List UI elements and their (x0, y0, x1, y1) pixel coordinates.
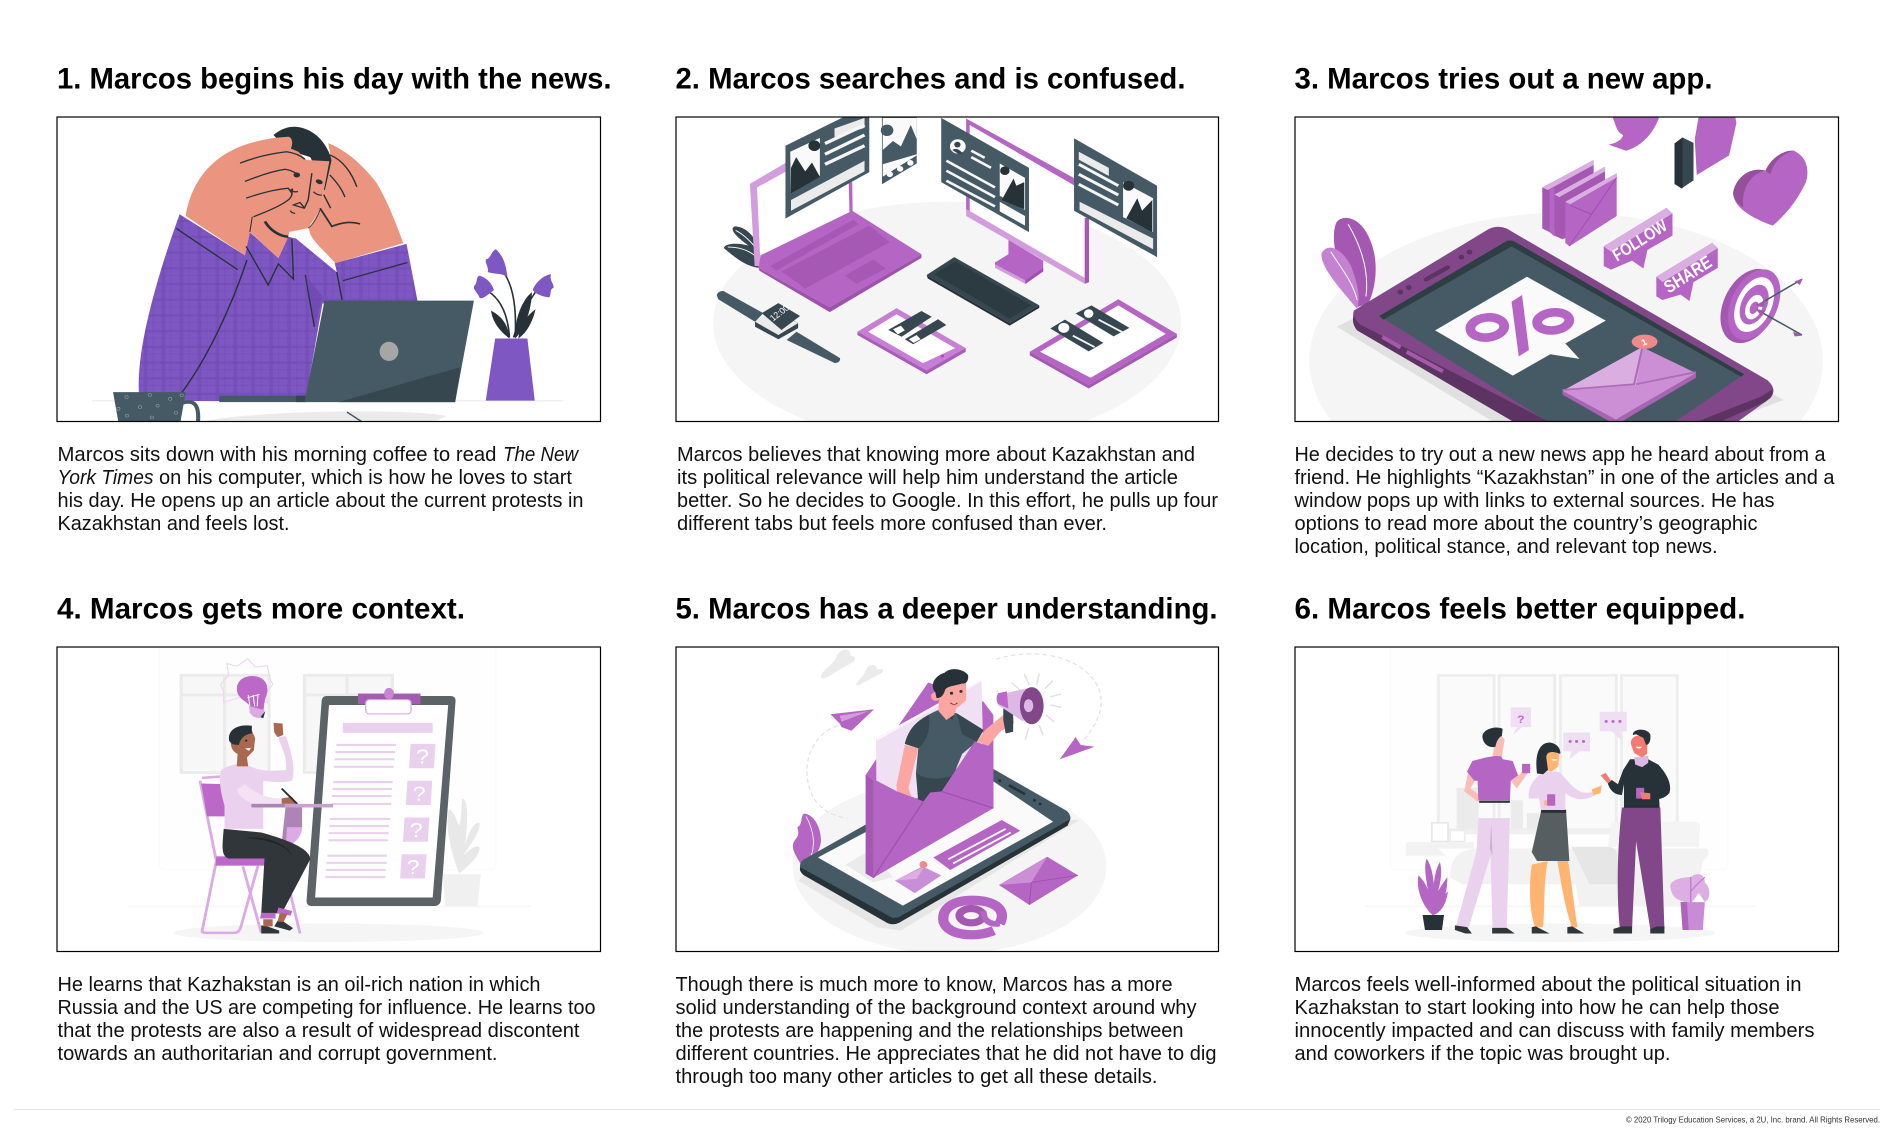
body text 6: Marcos feels well-informed about the political situation in (1294, 974, 1802, 996)
envelope front (866, 741, 993, 878)
keyboard (927, 257, 1039, 326)
at sign (943, 900, 1002, 935)
panel 6: Marcos feels better equipped (1294, 592, 1838, 1065)
chair (200, 776, 300, 934)
mail notification bar (933, 820, 1020, 870)
body text 6: innocently impacted and can discuss with family members (1294, 1020, 1814, 1042)
clipboard: ? (416, 746, 429, 768)
body text 3: options to read more about the country’s geographic (1294, 513, 1758, 535)
laptop (219, 301, 474, 402)
body text 3: friend. He highlights “Kazakhstan” in one of the articles and a (1294, 467, 1835, 489)
body text 4 (58, 974, 596, 1065)
browser window right center (941, 118, 1029, 232)
body text 2 (677, 444, 1218, 535)
illustration 6: three coworkers talking (1365, 645, 1755, 942)
panel 2: Marcos searches and is confused (676, 62, 1218, 535)
large tablet (1030, 299, 1177, 389)
body text 1: on his computer, which is how he loves to start (159, 467, 572, 489)
body text 3: location, political stance, and relevant top news. (1294, 536, 1718, 558)
smart watch: 12:00 (768, 303, 791, 323)
body text 6: Kazhakstan to start looking into how he can help those (1294, 997, 1780, 1019)
illustration 5: man emerging from envelope on phone (793, 650, 1106, 954)
clouds (821, 650, 883, 685)
body text 4: Russia and the US are competing for influence. He learns too (58, 997, 596, 1019)
smart watch (717, 291, 840, 363)
man right (1601, 730, 1670, 934)
envelope back and letter (866, 679, 993, 877)
clipboard (307, 688, 456, 906)
thumbs up (1675, 116, 1736, 189)
clipboard: ? (407, 856, 420, 879)
body text 2: different tabs but feels more confused than ever. (677, 513, 1107, 535)
illustration 3: phone with social icons (1310, 118, 1823, 421)
leaf (793, 814, 821, 866)
picture frame 1 (57, 117, 600, 422)
percent speech bubble (1435, 277, 1606, 376)
leaf (724, 226, 759, 268)
illustration 1: stressed man at laptop (92, 127, 563, 422)
follow bubble: FOLLOW (1608, 215, 1673, 264)
body text 5 (676, 974, 1216, 1088)
laptop (750, 162, 921, 312)
panel 4: Marcos gets more context (57, 592, 600, 1065)
body text 5: through too many other articles to get all these details. (676, 1066, 1158, 1088)
background plant (443, 799, 481, 906)
paper planes (831, 709, 1095, 759)
browser window middle (881, 116, 917, 184)
phone (798, 763, 1080, 931)
speech bubbles: ? (1517, 714, 1525, 726)
heading 1: 1. Marcos begins his day with the news. (57, 62, 612, 96)
plant in vase (474, 249, 554, 401)
body text 1: his day. He opens up an article about the current protests in (58, 490, 584, 512)
body text 4: towards an authoritarian and corrupt government. (58, 1043, 498, 1065)
left plant (1418, 859, 1448, 930)
stacked envelopes (1542, 160, 1617, 246)
illustration 2: devices with browser windows (713, 116, 1181, 445)
browser window left (785, 116, 869, 219)
picture frame 2 (676, 117, 1218, 422)
head, hair and hands (186, 127, 403, 263)
body text 2: its political relevance will help him understand the article (677, 467, 1178, 489)
woman center (1529, 742, 1602, 934)
speech bubbles (1511, 707, 1627, 759)
picture frame 3 (1295, 117, 1838, 422)
body text 1: Marcos sits down with his morning coffee to read (58, 444, 496, 466)
heading 6: 6. Marcos feels better equipped. (1294, 592, 1746, 626)
monitor (966, 119, 1089, 284)
picture frame 5 (676, 647, 1218, 952)
leaves (1321, 218, 1376, 309)
man left (1455, 728, 1531, 934)
panel 5: Marcos has a deeper understanding (676, 592, 1218, 1088)
panel 3: Marcos tries out a new app (1293, 62, 1838, 558)
man with megaphone (897, 669, 1061, 807)
coffee mug (113, 392, 198, 422)
body text 4: He learns that Kazhakstan is an oil-rich nation in which (58, 974, 540, 996)
browser window far right (1074, 138, 1157, 257)
share bubble: SHARE (1659, 252, 1717, 297)
body text 3: He decides to try out a new news app he heard about from a (1294, 444, 1826, 466)
body text 5: Though there is much more to know, Marcos has a more (676, 974, 1172, 996)
lightbulb (220, 659, 273, 718)
seated man (220, 723, 333, 934)
body text 4: that the protests are also a result of widespread discontent (58, 1020, 580, 1042)
background windows (181, 675, 392, 772)
heart (1733, 151, 1807, 226)
notification envelope: 1 (1640, 337, 1649, 348)
shirt (139, 214, 418, 402)
background skyline (1457, 788, 1539, 829)
body text 2: Marcos believes that knowing more about Kazakhstan and (677, 444, 1195, 466)
body text 1: Kazakhstan and feels lost. (58, 513, 290, 535)
body text 1: York Times (58, 467, 154, 489)
heading 2: 2. Marcos searches and is confused. (676, 62, 1186, 96)
picture frame 4 (57, 647, 600, 952)
dashed flight paths (807, 654, 1101, 818)
body text 1 (58, 444, 584, 535)
body text 3: window pops up with links to external sources. He has (1293, 490, 1774, 512)
twitter bird (1609, 116, 1660, 151)
body text 5: solid understanding of the background context around why (676, 997, 1196, 1019)
heading 4: 4. Marcos gets more context. (57, 592, 465, 626)
right plant (1670, 874, 1709, 930)
body text 6 (1294, 974, 1814, 1065)
body text 2: better. So he decides to Google. In this effort, he pulls up four (677, 490, 1218, 512)
body text 1: The New (503, 444, 579, 466)
mini envelope (895, 861, 941, 893)
body text 5: the protests are happening and the relationships between (676, 1020, 1184, 1042)
background windows (1438, 675, 1677, 830)
clipboard: ? (410, 819, 423, 842)
heading 5: 5. Marcos has a deeper understanding. (676, 592, 1218, 626)
notification envelope (1562, 335, 1696, 425)
body text 6: and coworkers if the topic was brought up. (1294, 1043, 1670, 1065)
heading 3: 3. Marcos tries out a new app. (1294, 62, 1712, 96)
clipboard: ? (413, 783, 426, 805)
picture frame 6 (1295, 647, 1838, 952)
illustration 4: man with clipboard and lightbulb (129, 645, 531, 942)
target with arrows (1720, 268, 1803, 344)
background furniture (1406, 822, 1708, 906)
envelope on ground (999, 857, 1078, 905)
small tablet (857, 308, 966, 374)
body text 3 (1293, 444, 1835, 558)
panel 1: Marcos begins his day with the news (57, 62, 612, 535)
phone (1353, 227, 1773, 425)
body text 5: different countries. He appreciates that he did not have to dig (676, 1043, 1216, 1065)
